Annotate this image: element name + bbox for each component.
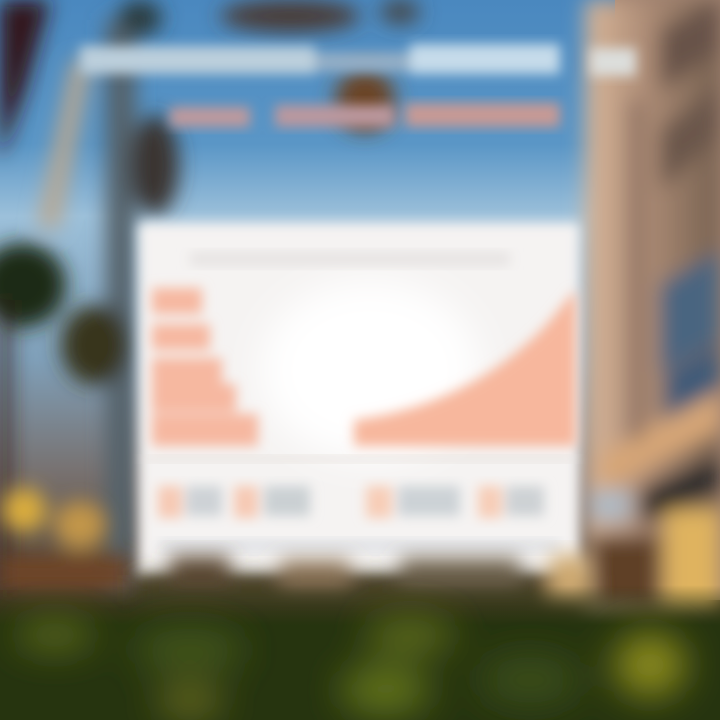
palm trunks and fronds on the left <box>0 0 420 590</box>
panel footer <box>160 540 560 552</box>
panel heading <box>190 252 510 266</box>
warm lights lower left <box>0 488 130 590</box>
building details on the right <box>585 0 720 620</box>
divider band <box>145 456 575 462</box>
stepped bar chart <box>152 288 258 446</box>
panel: billboard <box>138 222 580 578</box>
foreground base <box>0 585 720 720</box>
legend: right <box>366 486 544 518</box>
building base on the right <box>615 0 720 600</box>
subtitle band <box>170 103 560 127</box>
title band <box>80 44 636 76</box>
lower billboard edge <box>135 555 595 605</box>
area chart <box>354 290 576 446</box>
panel background <box>138 222 580 578</box>
panel highlight <box>260 280 480 460</box>
green shrubs foreground <box>15 617 686 718</box>
legend: left <box>158 486 310 518</box>
